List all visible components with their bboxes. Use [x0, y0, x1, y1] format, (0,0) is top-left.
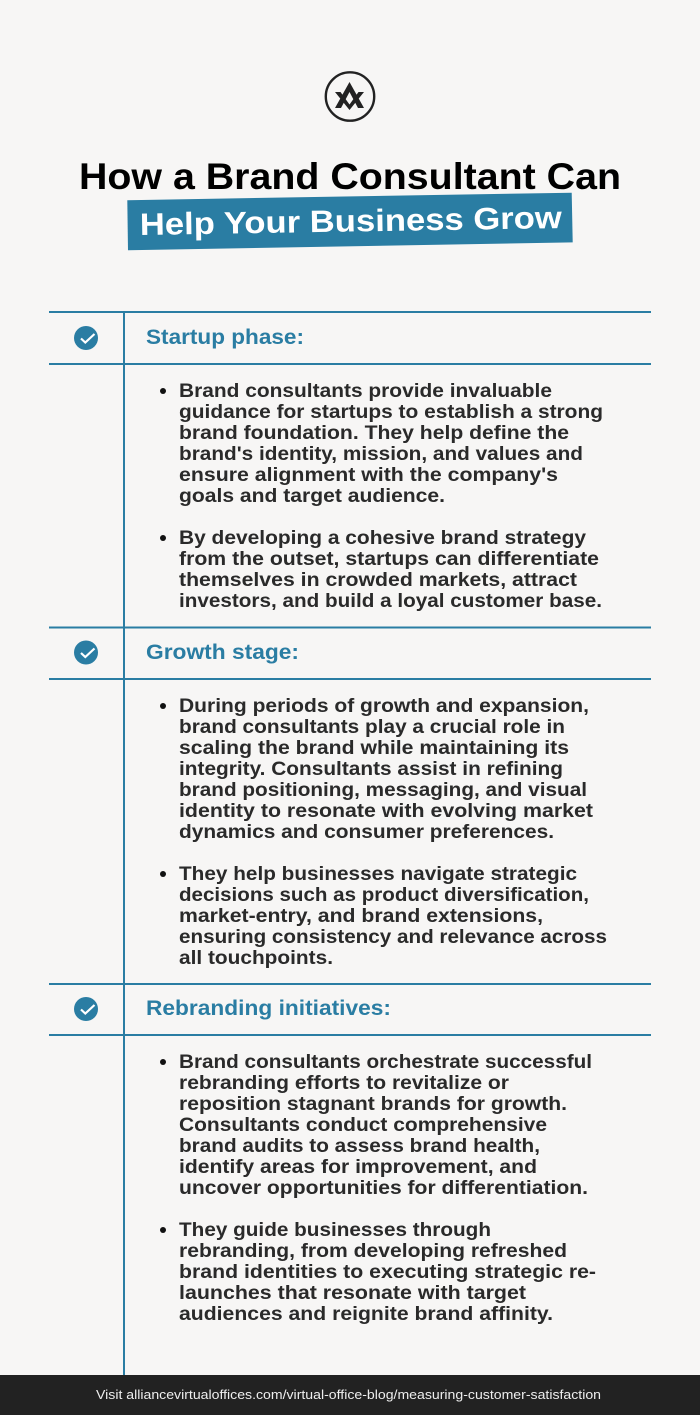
text block: growth stage bullets: all touchpoints. [179, 947, 333, 969]
text block: growth stage bullets: market-entry, and brand extensions, [179, 905, 543, 927]
text block: startup phase bullets: ensure alignment with the company's [179, 464, 558, 486]
text block: rebranding initiatives bullets: launches that resonate with target [179, 1282, 527, 1304]
text block: growth stage bullets: decisions such as product diversification, [179, 884, 589, 906]
icon: company logo [326, 72, 374, 121]
heading: growth stage: Growth stage: [146, 640, 299, 664]
text block: startup phase bullets: By developing a cohesive brand strategy [179, 527, 586, 549]
text block: growth stage bullets: dynamics and consumer preferences. [179, 821, 554, 843]
section: rebranding initiatives header [74, 996, 391, 1021]
text block: growth stage bullets [160, 695, 607, 969]
text block: rebranding initiatives bullets: brand audits to assess brand health, [179, 1135, 540, 1157]
text block: startup phase bullets: themselves in crowded markets, attract [179, 569, 578, 591]
text block: rebranding initiatives bullets: identify areas for improvement, and [179, 1156, 537, 1178]
text block: growth stage bullets: brand positioning, messaging, and visual [179, 779, 587, 801]
text block: rebranding initiatives bullets: rebranding efforts to revitalize or [179, 1072, 509, 1094]
icon: check badge [74, 997, 98, 1021]
text block: rebranding initiatives bullets: rebranding, from developing refreshed [179, 1240, 567, 1262]
text block: startup phase bullets [160, 380, 603, 612]
icon: check badge [74, 326, 98, 350]
text block: rebranding initiatives bullets: brand identities to executing strategic re- [179, 1261, 596, 1283]
text block: rebranding initiatives bullets [160, 1051, 596, 1325]
text block: rebranding initiatives bullets: Brand consultants orchestrate successful [179, 1051, 592, 1073]
table grid lines [49, 311, 651, 1375]
text block: startup phase bullets: goals and target audience. [179, 485, 445, 507]
text block: startup phase bullets: Brand consultants provide invaluable [179, 380, 552, 402]
text block: startup phase bullets: brand's identity, mission, and values and [179, 443, 583, 465]
icon: check badge [74, 640, 98, 664]
text block: startup phase bullets: from the outset, startups can differentiate [179, 548, 599, 570]
text block: rebranding initiatives bullets: They guide businesses through [179, 1219, 491, 1241]
text block: startup phase bullets: brand foundation. They help define the [179, 422, 569, 444]
text block: growth stage bullets: They help businesses navigate strategic [179, 863, 577, 885]
footer bar [0, 1375, 700, 1415]
text block: rebranding initiatives bullets: reposition stagnant brands for growth. [179, 1093, 567, 1115]
heading: startup phase: Startup phase: [146, 325, 304, 349]
text block: startup phase bullets: investors, and build a loyal customer base. [179, 590, 602, 612]
text block: growth stage bullets: During periods of growth and expansion, [179, 695, 589, 717]
text block: growth stage bullets: identity to resonate with evolving market [179, 800, 594, 822]
text block: rebranding initiatives bullets: audiences and reignite brand affinity. [179, 1303, 553, 1325]
text block: growth stage bullets: ensuring consistency and relevance across [179, 926, 607, 948]
footer bar: Visit alliancevirtualoffices.com/virtual-office-blog/measuring-customer-satisfaction [96, 1387, 601, 1402]
title highlight banner [127, 193, 573, 250]
title: How a Brand Consultant Can [79, 156, 621, 197]
section: startup phase header [74, 325, 304, 350]
text block: growth stage bullets: integrity. Consultants assist in refining [179, 758, 563, 780]
text block: growth stage bullets: scaling the brand while maintaining its [179, 737, 569, 759]
section: growth stage header [74, 640, 299, 664]
text block: growth stage bullets: brand consultants play a crucial role in [179, 716, 565, 738]
text block: startup phase bullets: guidance for startups to establish a strong [179, 401, 603, 423]
heading: rebranding initiatives: Rebranding initiatives: [146, 996, 391, 1020]
text block: rebranding initiatives bullets: Consultants conduct comprehensive [179, 1114, 547, 1136]
title highlight banner: Help Your Business Grow [140, 200, 563, 242]
text block: rebranding initiatives bullets: uncover opportunities for differentiation. [179, 1177, 588, 1199]
